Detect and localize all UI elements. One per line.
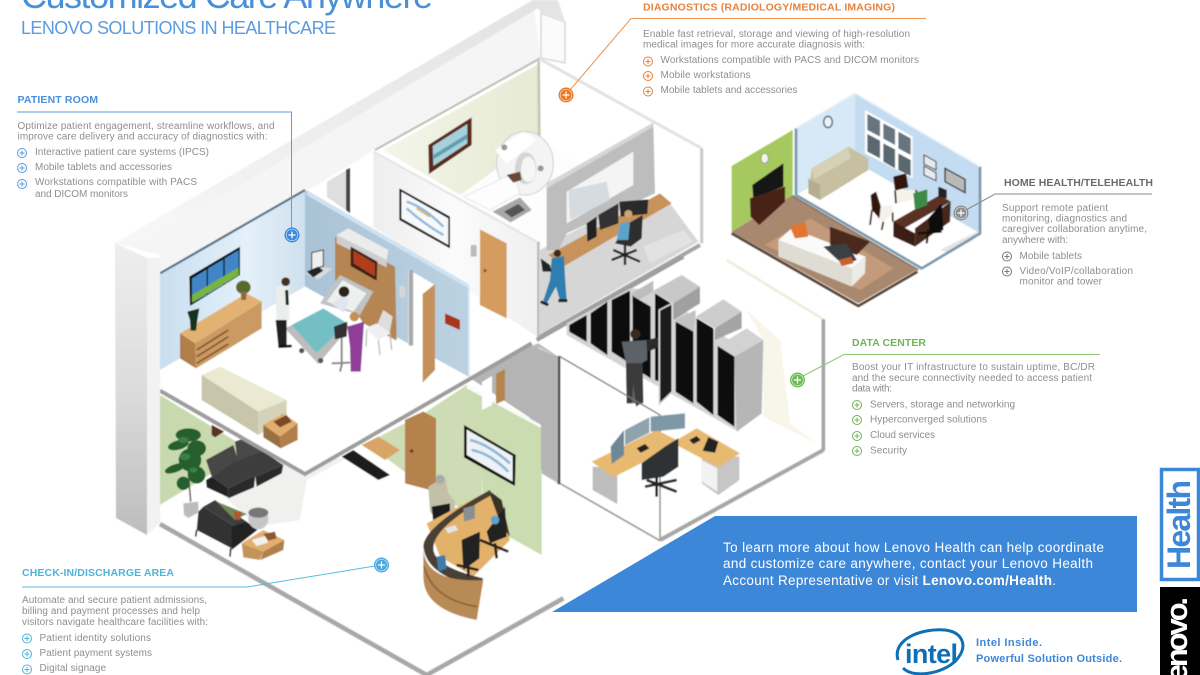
telehealth desk and chairs — [870, 173, 951, 247]
text block: data center intro — [852, 362, 1095, 394]
beige sofa — [808, 147, 868, 200]
text block: diagnostics intro: Enable fast retrieval, storage and viewing of high-resolution — [643, 29, 910, 40]
green living room — [732, 130, 918, 306]
list: patient room solutions: Workstations compatible with PACS — [35, 177, 197, 188]
bedside monitor shelf — [305, 250, 333, 279]
title: LENOVO SOLUTIONS IN HEALTHCARE — [21, 18, 336, 38]
list: check-in solutions: Patient payment systems — [40, 648, 152, 659]
list: home health solutions: Video/VoIP/collaboration — [1020, 266, 1133, 277]
intel tagline — [976, 637, 1122, 665]
wall picture — [212, 425, 224, 437]
grey utility wall behind lobby — [470, 345, 558, 482]
engineer at server rack — [622, 329, 658, 407]
leader line: patient room — [17, 112, 292, 229]
round side stool — [248, 507, 268, 529]
operator desk and monitors — [548, 193, 672, 267]
heading: data center: DATA CENTER — [852, 337, 926, 349]
control partition with window — [547, 123, 655, 251]
list: data center solutions: Security — [870, 446, 907, 456]
list: check-in solutions — [22, 633, 152, 674]
heading: diagnostics: DIAGNOSTICS (RADIOLOGY/MEDICAL IMAGING) — [643, 2, 895, 14]
framed picture — [428, 117, 472, 174]
living room sofa with person — [778, 222, 870, 287]
technician in blue scrubs — [541, 250, 567, 305]
call to action banner — [552, 516, 1137, 612]
list: diagnostics solutions: Workstations compatible with PACS and DICOM monitors — [660, 55, 919, 66]
isometric building illustration — [115, 0, 980, 675]
panel: patient room — [17, 94, 300, 242]
text block: home health intro — [1002, 203, 1147, 246]
logo: intel — [897, 630, 963, 674]
intel tagline: Intel Inside. — [976, 637, 1042, 649]
visitor chair — [365, 310, 393, 355]
list: data center solutions: Servers, storage and networking — [870, 400, 1015, 410]
list: patient room solutions: Interactive patient care systems (IPCS) — [35, 147, 209, 158]
leader line: check-in — [22, 566, 375, 587]
black leather sofa — [206, 439, 283, 498]
potted plant — [164, 428, 206, 518]
list: data center solutions: Cloud services — [870, 430, 935, 441]
list: diagnostics solutions — [644, 55, 919, 96]
panel: check-in and discharge area — [22, 558, 389, 674]
headwall and vitals screen — [335, 228, 397, 341]
window — [865, 110, 913, 178]
room: check-in and discharge lobby — [160, 385, 563, 675]
text block: check-in intro: visitors navigate healthcare facilities with: — [22, 617, 208, 628]
logo: health: Health — [1161, 480, 1197, 569]
room: patient room — [160, 190, 532, 474]
list: home health solutions — [1002, 251, 1133, 288]
list: home health solutions: Mobile tablets — [1020, 251, 1082, 262]
leader line: data center — [803, 354, 1100, 376]
list: diagnostics solutions: Mobile workstations — [660, 70, 750, 81]
text block: data center intro: and the secure connectivity needed to access patient — [852, 373, 1092, 384]
text block: diagnostics intro: medical images for more accurate diagnosis with: — [643, 40, 865, 50]
text block: home health intro: anywhere with: — [1002, 235, 1068, 246]
blue bedroom walls and floor — [796, 93, 980, 268]
list: patient room solutions: and DICOM monitors — [35, 189, 128, 200]
doctor in white coat — [276, 277, 292, 347]
list: home health solutions: monitor and tower — [1020, 276, 1103, 288]
admin L-shaped desk with monitors — [592, 413, 740, 504]
marker: data center — [790, 372, 805, 388]
text block: patient room intro: Optimize patient engagement, streamline workflows, and — [18, 121, 274, 132]
server racks — [567, 275, 763, 432]
call to action banner: To learn more about how Lenovo Health can help coordinate — [723, 540, 1104, 555]
list: data center solutions — [852, 400, 1015, 456]
text block: check-in intro: Automate and secure patient admissions, — [22, 595, 207, 606]
waiting area seating and plant — [164, 425, 284, 560]
left corner column — [115, 243, 160, 535]
wall display and credenza — [180, 247, 262, 368]
text block: data center intro: data with: — [852, 384, 892, 394]
curved reception desk with staff — [423, 475, 510, 620]
title — [21, 0, 433, 38]
marker: patient room — [284, 228, 300, 242]
room: home health telehealth — [732, 93, 980, 306]
panel: diagnostics — [558, 2, 926, 102]
wall screen — [464, 425, 516, 486]
logo: intel: intel — [905, 639, 958, 669]
heading: patient room: PATIENT ROOM — [18, 94, 98, 106]
text block: check-in intro: billing and payment processes and help — [22, 606, 200, 617]
panel: home health — [954, 177, 1153, 288]
left partition wall — [373, 152, 538, 338]
lobby door — [405, 412, 436, 492]
heading: home health: HOME HEALTH/TELEHEALTH — [1004, 177, 1153, 189]
list: patient room solutions — [18, 147, 209, 200]
leader line: diagnostics — [570, 18, 926, 90]
call to action banner: Account Representative or visit Lenovo.com/Health. — [723, 573, 1056, 588]
intel tagline: Powerful Solution Outside. — [976, 653, 1122, 665]
glass wall and grey column — [530, 343, 823, 541]
text block: home health intro: monitoring, diagnostics and — [1002, 214, 1127, 224]
text block: check-in intro — [22, 595, 208, 628]
room: data center — [530, 257, 823, 541]
list: patient room solutions: Mobile tablets and accessories — [35, 162, 172, 173]
TV and console — [750, 163, 785, 225]
nurse in purple scrubs with cart — [332, 312, 364, 372]
text block: patient room intro: improve care delivery and accuracy of diagnostics with: — [18, 132, 268, 142]
text block: home health intro: Support remote patient — [1002, 203, 1108, 214]
text block: diagnostics intro — [643, 29, 910, 50]
entrance mat and bench — [342, 437, 400, 480]
CT scanner — [463, 132, 553, 222]
call to action banner: and customize care anywhere, contact your Lenovo Health — [723, 556, 1093, 571]
text block: data center intro: Boost your IT infrastructure to sustain uptime, BC/DR — [852, 362, 1095, 373]
list: diagnostics solutions: Mobile tablets and accessories — [660, 85, 798, 96]
patient bed — [285, 275, 373, 364]
marker: home health — [954, 206, 968, 220]
list: check-in solutions: Patient identity solutions — [40, 633, 151, 644]
family sofa and side table — [202, 367, 298, 448]
outer back wall — [115, 0, 565, 273]
marker: diagnostics — [558, 88, 574, 102]
room: diagnostics radiology — [373, 58, 702, 338]
heading: check-in: CHECK-IN/DISCHARGE AREA — [22, 567, 174, 579]
list: data center solutions: Hyperconverged solutions — [870, 414, 987, 426]
coffee table — [242, 530, 284, 560]
panel: data center — [790, 337, 1100, 456]
text block: home health intro: caregiver collaboration anytime, — [1002, 224, 1147, 235]
open door and alarm box — [399, 269, 460, 383]
list: check-in solutions: Digital signage — [40, 663, 106, 674]
text block: patient room intro — [18, 121, 274, 142]
wall clocks and pictures — [761, 116, 965, 193]
armchair with visitor — [196, 500, 257, 557]
marker: check-in — [374, 558, 389, 572]
leader line: home health — [966, 194, 1152, 210]
